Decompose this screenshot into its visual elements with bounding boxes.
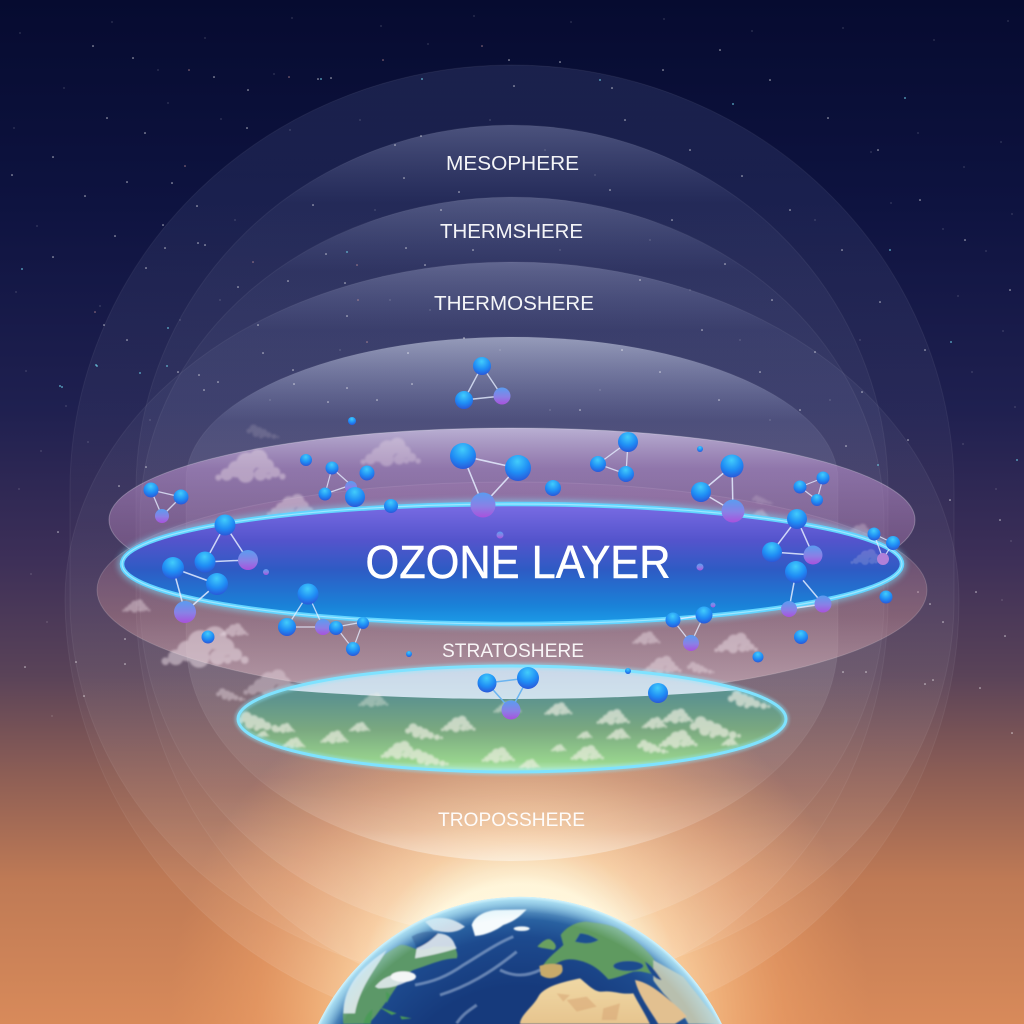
- label: troposshere: TROPOSSHERE: [438, 810, 585, 831]
- molecule: right lower in ring: [781, 561, 832, 617]
- pale overlap band: [288, 668, 736, 699]
- troposphere green disc: [52, 559, 972, 772]
- label: thermoshere: THERMOSHERE: [434, 293, 594, 315]
- layer labels: [434, 153, 594, 831]
- asia east: [653, 960, 721, 1024]
- molecule: on green disc: [478, 667, 539, 720]
- cloud over ozone right end: [850, 549, 884, 565]
- earth: [318, 897, 722, 1024]
- molecule: far left small: [144, 482, 188, 523]
- africa: [520, 978, 650, 1024]
- clouds around the ozone layer: [122, 424, 874, 701]
- canadian cloud cover: [343, 918, 465, 1013]
- molecule: far right: [868, 528, 900, 565]
- iceland: [514, 926, 530, 931]
- greenland: [472, 909, 527, 936]
- starfield: [12, 16, 1017, 733]
- iberia: [539, 964, 563, 978]
- molecule: upper right large: [691, 454, 744, 522]
- shell: second dome: [136, 125, 888, 998]
- ozone layer ellipse: [122, 504, 902, 624]
- cloud over florida: [391, 971, 416, 982]
- hudson bay: [412, 932, 438, 948]
- shell: wide lower dome: [65, 262, 959, 1024]
- molecule: lower left on ring: [278, 584, 331, 636]
- molecule: right upper in ring: [762, 509, 822, 564]
- molecule: lower left adjacent: [329, 617, 369, 656]
- molecule: upper centre right: [590, 432, 638, 482]
- caspian: [645, 962, 662, 980]
- shell: outer dome: [70, 65, 954, 985]
- clouds on green disc: [236, 690, 770, 769]
- saharan blotches: [557, 993, 620, 1020]
- atlantic cloud streaks: [415, 937, 540, 1023]
- free oxygen atoms: [202, 417, 892, 703]
- arabia: [635, 980, 687, 1024]
- molecule: clustered upper left: [318, 462, 365, 507]
- label: thermshere: THERMSHERE: [440, 221, 583, 243]
- molecule: large centre: [450, 443, 531, 518]
- black sea: [613, 961, 643, 971]
- label: stratoshere: STRATOSHERE: [442, 641, 584, 662]
- title: ozone layer: OZONE LAYER: [366, 536, 670, 588]
- lower stratosphere pink disc: [97, 482, 927, 698]
- molecule: upper right small: [794, 472, 830, 506]
- shell: third dome: [140, 197, 884, 938]
- british isles: [537, 939, 556, 950]
- europe: [542, 922, 667, 979]
- north america: [343, 945, 457, 1024]
- molecule: left lower on ring: [162, 557, 228, 623]
- ozone molecules: [144, 357, 900, 720]
- molecule: lower right of centre: [666, 606, 712, 651]
- molecule: left upper on ring: [194, 514, 258, 572]
- baltic: [575, 933, 598, 943]
- central america: [363, 992, 412, 1024]
- shell: inner dome: [186, 337, 838, 861]
- upper stratosphere purple disc: [109, 428, 915, 612]
- label: mesophere: MESOPHERE: [446, 153, 579, 175]
- molecule: top centre: [455, 357, 510, 409]
